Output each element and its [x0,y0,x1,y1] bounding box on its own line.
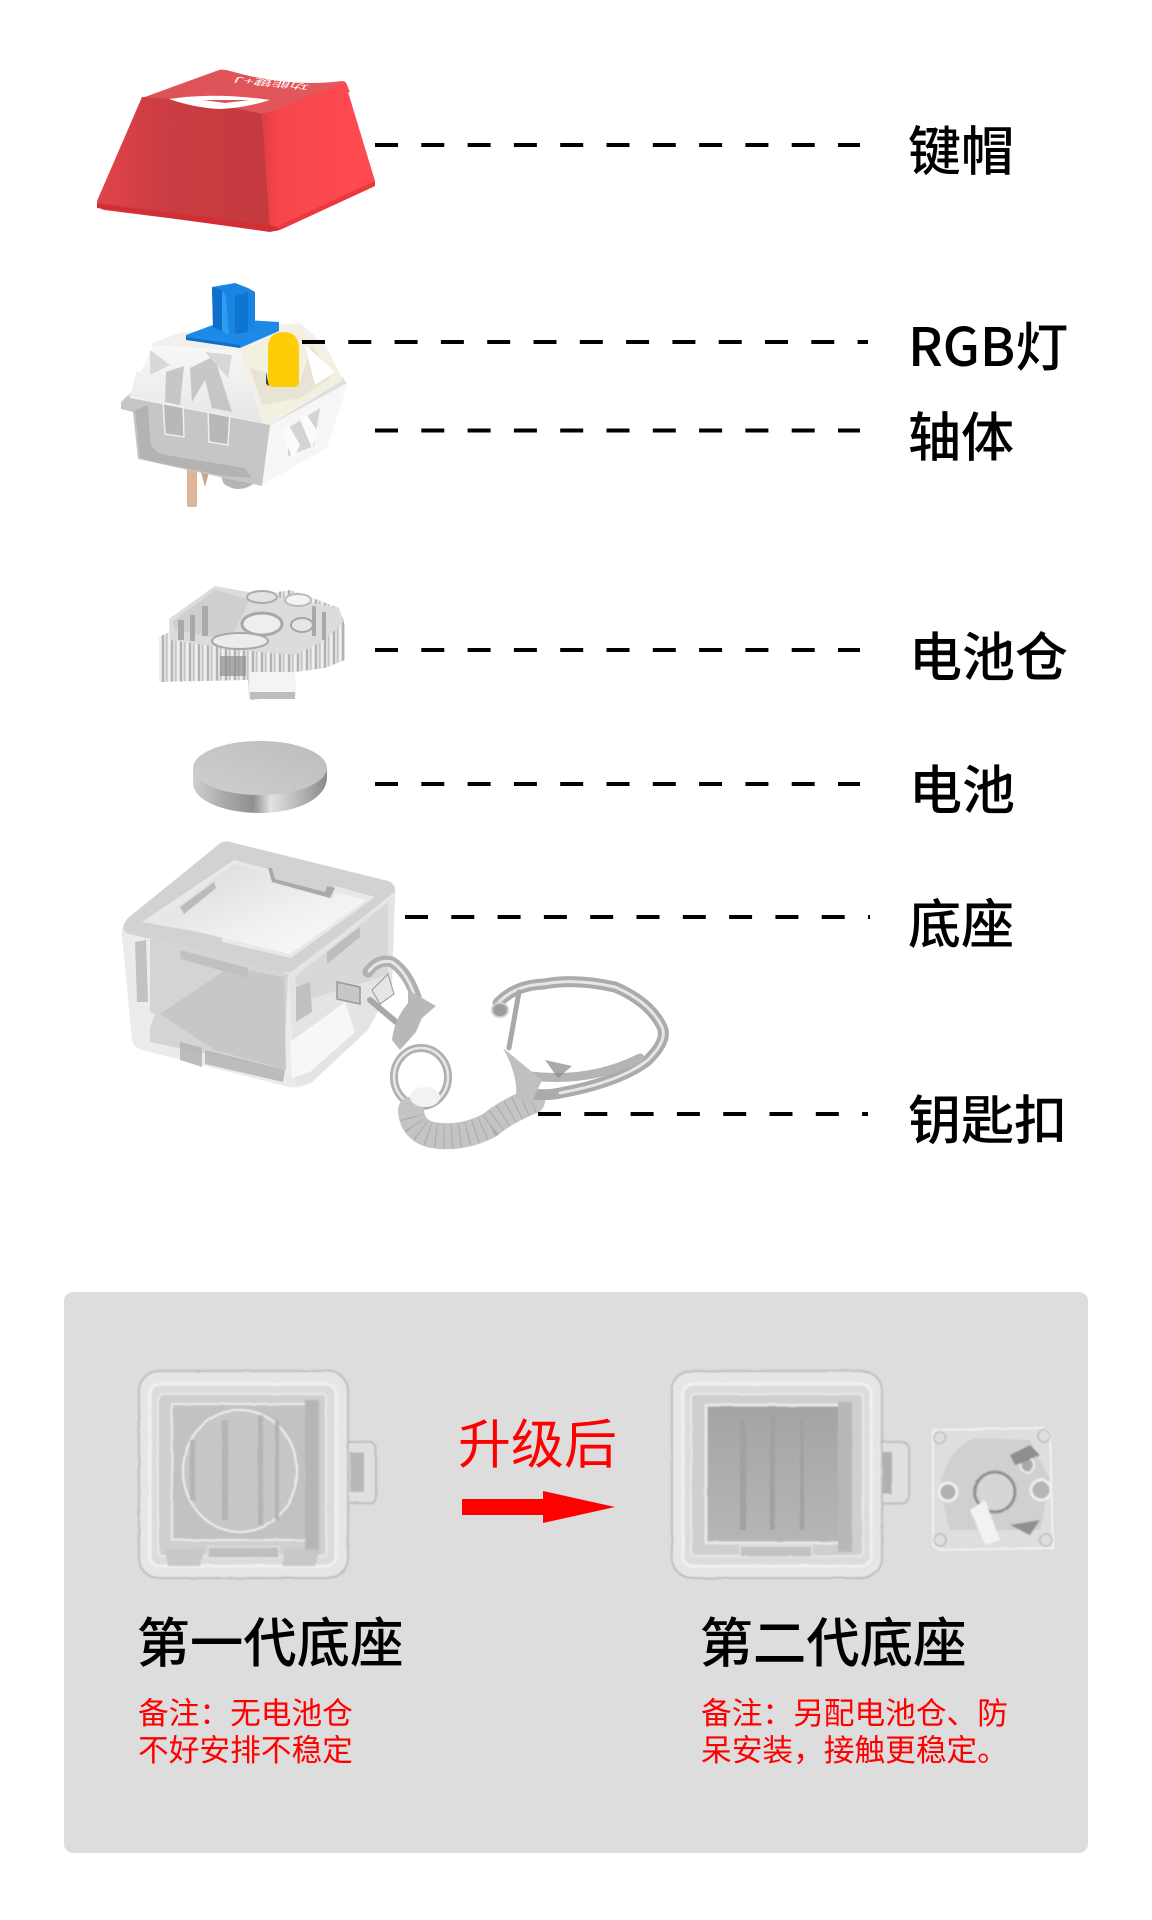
clasp gate [509,992,519,1048]
label: battery: 电池 [909,749,1015,825]
keycap right face [262,82,375,231]
label: holder: 电池仓 [909,616,1068,692]
upgrade label: 升级后 [458,1403,617,1479]
second gen metal floor [706,1405,840,1543]
switch pin [187,465,197,507]
dashed leader lines [302,145,870,1114]
first gen battery circle [183,1410,297,1532]
holder silhouette [159,586,345,700]
icon: battery [193,741,327,813]
lobster clasp [368,961,420,1012]
note: second generation: 呆安装，接触更稳定。 [701,1725,1008,1770]
battery top [193,741,327,795]
heading: first generation: 第一代底座 [136,1601,403,1678]
leader: battery [375,782,860,786]
switch blue stem [212,283,255,335]
leader: holder [375,648,860,652]
base hanging tab [337,982,360,1004]
big ring [498,982,663,1095]
keycap legend: 功能键+J [231,74,311,93]
label: RGB: RGB灯 [908,306,1068,382]
panel background [64,1292,1088,1853]
label: switch: 轴体 [908,396,1014,472]
note: first generation: 不好安排不稳定 [138,1725,353,1770]
base front face [150,936,288,1070]
label: base: 底座 [908,883,1014,959]
base right face [288,894,395,1086]
label: keyring: 钥匙扣 [908,1079,1067,1155]
switch blue stem base [186,319,279,348]
photo: second generation base [672,1371,909,1578]
leader: switch [375,428,860,432]
switch white housing side [262,383,347,486]
icon: keyring [368,961,663,1136]
icon: red keycap [97,70,375,232]
battery side [193,769,327,813]
photo: first generation base [139,1371,376,1578]
leader: base [405,915,870,919]
photo: battery holder [933,1428,1053,1550]
holder top face [169,586,343,655]
holder round wells [242,613,282,635]
icon: battery holder [159,586,345,700]
leader: RGB [302,340,868,344]
base top rim [123,841,395,973]
switch center post [218,470,258,489]
panel: generation comparison [64,1292,1088,1853]
heading: second generation: 第二代底座 [700,1601,966,1678]
note: first generation: 备注：无电池仓 [138,1688,353,1733]
arrow: upgrade [462,1491,615,1523]
keycap front face [97,97,272,231]
switch clear housing [130,323,343,425]
leader: keyring [538,1112,868,1116]
label: keycap: 键帽 [908,110,1014,186]
icon: mechanical switch [121,283,347,507]
switch gray housing front [121,396,272,486]
keycap logo [169,96,270,109]
icon: yellow RGB LED [268,332,299,387]
base inner opening [142,860,375,958]
note: second generation: 备注：另配电池仓、防 [701,1688,1008,1733]
base outer body [122,841,395,1087]
leader: keycap line [375,143,860,147]
icon: transparent base [122,841,395,1087]
keycap top [142,70,350,116]
labels [908,110,1068,1155]
ribbed tail [411,1101,532,1136]
small ring [394,1048,448,1106]
